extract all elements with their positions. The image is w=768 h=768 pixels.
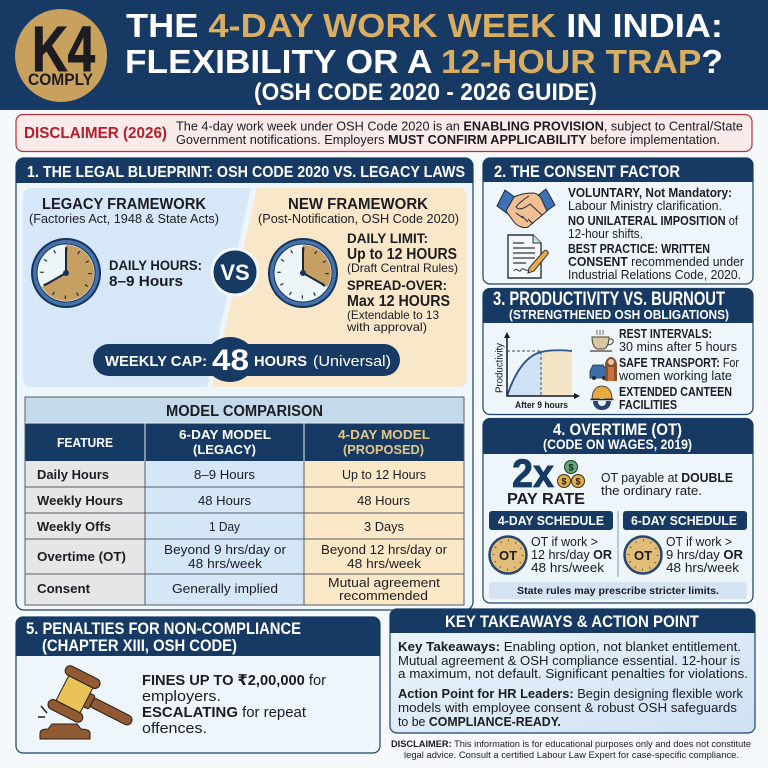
6-day schedule: 6-DAY SCHEDULE [631, 514, 737, 528]
consent text: Industrial Relations Code, 2020. [568, 268, 741, 282]
panel 2 heading [483, 158, 753, 182]
new framework side: (Post-Notification, OSH Code 2020) [258, 212, 459, 226]
consent text: NO UNILATERAL IMPOSITION of [568, 214, 738, 228]
model comparison table: (PROPOSED) [343, 442, 424, 457]
disclaimer banner [16, 114, 752, 152]
title [125, 7, 723, 106]
action point text: Action Point for HR Leaders: Begin designing flexible work [398, 686, 743, 701]
model comparison table: 4-DAY MODEL [338, 427, 430, 442]
consent text: BEST PRACTICE: WRITTEN [568, 242, 710, 256]
action point text: models with employee consent & robust OSH safeguards [398, 700, 737, 715]
panel 4 heading: 4. OVERTIME (OT) [553, 421, 682, 439]
model comparison table: Daily Hours [37, 468, 109, 482]
obligations text: REST INTERVALS: [619, 327, 712, 341]
4-day schedule [489, 511, 613, 575]
model comparison table: 48 Hours [357, 494, 410, 508]
model comparison table: Weekly Hours [37, 494, 123, 508]
icon: signed document [508, 235, 548, 278]
panel 3 heading: (STRENGTHENED OSH OBLIGATIONS) [509, 307, 729, 322]
icon: legacy clock [31, 238, 101, 308]
obligations text: EXTENDED CANTEEN [619, 385, 732, 399]
panel 3: productivity vs burnout [483, 288, 753, 414]
key takeaways text [398, 639, 748, 681]
double rate text: the ordinary rate. [601, 483, 702, 498]
double rate text [601, 470, 733, 498]
panel 4 heading: (CODE ON WAGES, 2019) [543, 436, 692, 452]
icon: coffee cup [590, 330, 613, 351]
footer disclaimer: legal advice. Consult a certified Labour Law Expert for case-specific compliance. [404, 750, 739, 761]
legacy framework side [23, 188, 251, 387]
4-day schedule: 12 hrs/day OR [531, 547, 613, 562]
new framework side: Up to 12 HOURS [347, 246, 457, 263]
icon: OT clock: OT [634, 548, 652, 563]
icon: car and woman [590, 357, 617, 381]
model comparison table: Weekly Offs [37, 520, 111, 534]
panel 5: penalties [16, 617, 380, 753]
disclaimer banner: Government notifications. Employers MUST CONFIRM APPLICABILITY before implementation. [176, 133, 720, 147]
model comparison table: Generally implied [172, 582, 278, 596]
chart: productivity curve: After 9 hours [515, 400, 568, 411]
model comparison table: Mutual agreement [328, 576, 441, 590]
4-day schedule: OT if work > [531, 534, 598, 549]
model comparison table: 1 Day [209, 519, 240, 534]
new framework side: NEW FRAMEWORK [288, 196, 428, 213]
panel 1 heading [16, 158, 473, 183]
new framework side: (Draft Central Rules) [347, 261, 458, 275]
6-day schedule: OT if work > [666, 534, 732, 549]
obligations text: SAFE TRANSPORT: For [619, 356, 739, 370]
panel 5 heading [16, 617, 380, 656]
legacy framework side: DAILY HOURS: [109, 257, 202, 273]
2x pay rate: PAY RATE [507, 491, 585, 508]
new framework side: with approval) [346, 320, 427, 334]
panel 4: overtime [483, 418, 753, 603]
panel 2 heading: 2. THE CONSENT FACTOR [494, 163, 680, 181]
legacy framework side: LEGACY FRAMEWORK [42, 196, 206, 213]
consent text: 12-hour shifts. [568, 227, 643, 241]
weekly cap pill: HOURS [254, 353, 307, 370]
obligations text: 30 mins after 5 hours [619, 340, 737, 354]
2x pay rate: $ [575, 476, 581, 486]
title: (OSH CODE 2020 - 2026 GUIDE) [254, 79, 597, 106]
model comparison table: 8–9 Hours [194, 468, 255, 482]
4-day schedule: 4-DAY SCHEDULE [498, 514, 604, 528]
new framework side: DAILY LIMIT: [347, 230, 428, 246]
new framework side: SPREAD-OVER: [347, 277, 447, 293]
logo: K4 Comply: K4 [32, 13, 95, 85]
VS badge [212, 249, 258, 295]
model comparison table: Consent [37, 582, 91, 596]
consent text: CONSENT recommended under [568, 255, 744, 269]
6-day schedule: 48 hrs/week [666, 560, 740, 575]
VS badge: VS [220, 260, 250, 285]
penalty text: employers. [142, 688, 221, 705]
obligations text: women working late [618, 369, 732, 383]
new framework side: (Extendable to 13 [347, 308, 439, 322]
2x pay rate: $ [561, 476, 567, 486]
panel 5 heading: 5. PENALTIES FOR NON-COMPLIANCE [26, 619, 301, 638]
model comparison table: 48 hrs/week [347, 557, 422, 571]
chart: productivity curve: Productivity [494, 343, 506, 393]
footer disclaimer [391, 739, 751, 761]
model comparison table [25, 397, 464, 605]
consent text: VOLUNTARY, Not Mandatory: [568, 186, 732, 200]
action point text: to be COMPLIANCE-READY. [398, 714, 561, 729]
penalty text: ESCALATING for repeat [142, 704, 307, 721]
logo: K4 Comply: COMPLY [28, 70, 94, 89]
title: THE 4-DAY WORK WEEK IN INDIA: [126, 7, 723, 44]
weekly cap pill: WEEKLY CAP: [105, 353, 207, 370]
6-day schedule: 9 hrs/day OR [666, 547, 744, 562]
model comparison table: MODEL COMPARISON [166, 403, 323, 420]
model comparison table: Beyond 9 hrs/day or [164, 543, 286, 557]
disclaimer banner: The 4-day work week under OSH Code 2020 is an ENABLING PROVISION, subject to Central/State [176, 120, 743, 134]
model comparison table: FEATURE [57, 435, 113, 450]
key takeaways text: a maximum, not default. Significant penalties for violations. [398, 666, 748, 681]
obligations text: FACILITIES [619, 398, 677, 412]
key takeaways text: Key Takeaways: Enabling option, not blanket entitlement. [398, 639, 741, 654]
icon: helmet and gear [590, 386, 614, 410]
consent text: Labour Ministry clarification. [568, 199, 722, 213]
panel 2: consent factor [483, 158, 753, 284]
new framework side: Max 12 HOURS [347, 293, 450, 310]
model comparison table: 48 hrs/week [188, 557, 263, 571]
penalty text: offences. [142, 720, 207, 737]
2x pay rate: $ [568, 462, 574, 472]
weekly cap pill: 48 [212, 344, 249, 377]
icon: handshake [497, 189, 555, 228]
model comparison table: 3 Days [364, 520, 404, 534]
model comparison table: Overtime (OT) [37, 550, 126, 564]
model comparison table: recommended [339, 589, 428, 603]
double rate text: OT payable at DOUBLE [601, 470, 733, 485]
legacy framework side: (Factories Act, 1948 & State Acts) [29, 212, 219, 226]
disclaimer banner: DISCLAIMER (2026) [24, 125, 167, 142]
logo: K4 Comply [15, 9, 107, 102]
state rules note [489, 582, 747, 599]
panel 5 heading: (CHAPTER XIII, OSH CODE) [42, 636, 237, 655]
panel: key takeaways and action point [390, 609, 755, 733]
consent text [568, 186, 744, 282]
model comparison table: Up to 12 Hours [342, 468, 426, 482]
icon: new framework clock [268, 238, 338, 308]
new framework side [212, 188, 467, 387]
key takeaways heading: KEY TAKEAWAYS & ACTION POINT [445, 612, 700, 631]
weekly cap pill [93, 337, 400, 382]
header banner [0, 0, 768, 110]
obligations text [618, 327, 739, 412]
model comparison table: 6-DAY MODEL [179, 427, 271, 442]
footer disclaimer: DISCLAIMER: This information is for educational purposes only and does not constitute [391, 739, 751, 750]
panel 1: legal blueprint [16, 158, 473, 610]
model comparison table: 48 Hours [198, 494, 251, 508]
6-day schedule [623, 511, 747, 575]
model comparison table: Beyond 12 hrs/day or [321, 543, 447, 557]
model comparison table: (LEGACY) [193, 442, 256, 457]
key takeaways text: Mutual agreement & OSH compliance essential. 12-hour is [398, 653, 740, 668]
2x pay rate [507, 452, 585, 508]
legacy framework side: 8–9 Hours [109, 273, 183, 290]
key takeaways heading [390, 609, 755, 633]
panel 4 heading [483, 418, 753, 454]
chart: productivity curve [494, 332, 580, 411]
action point text [398, 686, 743, 729]
icon: OT clock: OT [499, 548, 517, 563]
4-day schedule: 48 hrs/week [531, 560, 605, 575]
2x pay rate: 2x [512, 452, 554, 496]
icon: gavel [38, 664, 142, 744]
title: FLEXIBILITY OR A 12-HOUR TRAP ? [125, 43, 723, 80]
panel 3 heading [483, 288, 753, 323]
weekly cap pill: (Universal) [313, 353, 391, 370]
panel 1 heading: 1. THE LEGAL BLUEPRINT: OSH CODE 2020 VS. LEGACY LAWS [27, 164, 465, 181]
penalty text [142, 672, 326, 737]
state rules note: State rules may prescribe stricter limits. [517, 585, 719, 597]
penalty text: FINES UP TO ₹2,00,000 for [142, 672, 326, 689]
